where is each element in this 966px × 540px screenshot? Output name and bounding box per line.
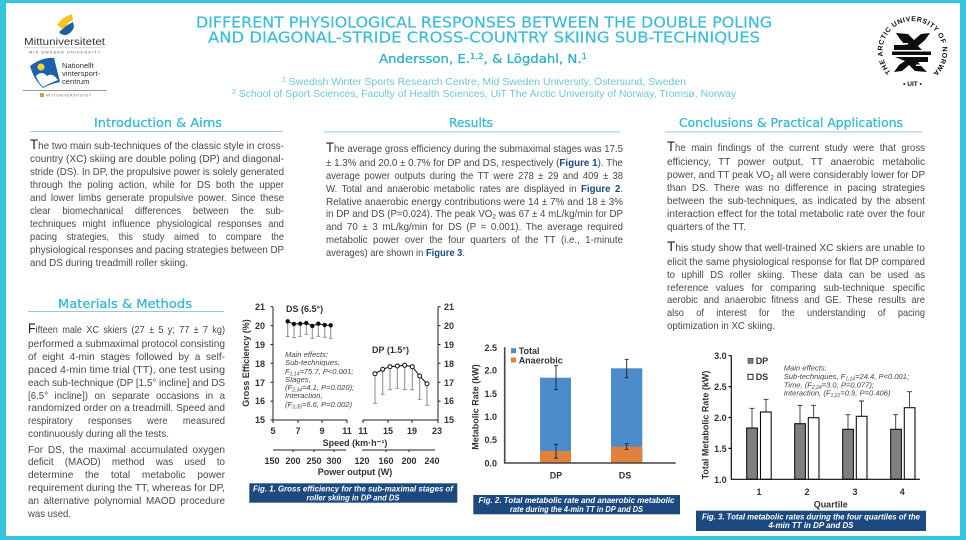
- x axis labels: 7: [295, 426, 301, 436]
- text: methods body: For DS, the maximal accumulated oxygen: [28, 445, 225, 456]
- caption: figure 1: roller skiing in DP and DS: [306, 492, 400, 502]
- text: conclusions body: reference values for comparing sub-technique specific: [667, 283, 925, 294]
- y axis labels: 1.5: [484, 389, 497, 399]
- text: methods body: continuously during all the tests.: [28, 429, 169, 440]
- logo: Nationellt vintersportcentrum: Nationellt: [62, 61, 95, 70]
- x axis labels: 1: [756, 487, 762, 497]
- authors: Andersson, E.: [379, 51, 465, 66]
- text: results body: metabolic power over the four quarters of the TT (i.e., 1-minute: [326, 235, 623, 246]
- y axis labels: 1.0: [714, 475, 727, 485]
- x axis labels: 15: [383, 426, 393, 436]
- statistics note: =4.1, P=0.020);: [302, 383, 354, 392]
- statistics note: (F: [285, 383, 292, 392]
- logo: UiT The Arctic University of Norway: • UIT •: [903, 81, 923, 88]
- y axis labels: 17: [444, 378, 454, 388]
- statistics note: 1,14: [290, 372, 300, 378]
- x axis labels: 5: [270, 426, 276, 436]
- y axis labels: 15: [255, 415, 265, 425]
- caption: figure 3: [696, 511, 926, 531]
- y axis labels: 3.0: [714, 351, 727, 361]
- statistics note: Stages,: [285, 375, 311, 384]
- legend: [748, 356, 768, 382]
- x axis labels: Quartile: [814, 500, 848, 510]
- x axis labels: DP: [550, 470, 562, 480]
- y axis labels: 2.5: [484, 343, 497, 353]
- title: [196, 14, 772, 46]
- text: methods body: paced 4-min time trial (TT), one test using: [28, 365, 225, 376]
- caption: figure 1: [249, 483, 457, 503]
- text: methods body: performed a submaximal protocol consisting: [28, 339, 225, 350]
- logo: Mittuniversitetet: MID SWEDEN UNIVERSITY: [29, 50, 100, 54]
- text: results body: ± 1.3% and 20.0 ± 0.7% for DP and DS, respectively (Figure 1). The: [326, 158, 623, 169]
- panel: results: [324, 115, 623, 259]
- affiliations: 1: [282, 77, 286, 84]
- logo: Nationellt vintersportcentrum: MITTUNIVERSITETET: [46, 94, 91, 98]
- text: results body: average power outputs during the TT were 278 ± 29 and 409 ± 38: [326, 171, 623, 182]
- bars: [747, 408, 915, 479]
- y axis labels: 19: [444, 340, 454, 350]
- y axis labels: 2.0: [714, 413, 727, 423]
- y axis labels: 18: [255, 359, 265, 369]
- y axis labels: 15: [444, 415, 454, 425]
- statistics note: =3.0, P=0.077);: [822, 380, 874, 389]
- statistics note: Interaction, (F: [784, 388, 831, 398]
- x axis labels: 11: [358, 426, 368, 436]
- axes: [728, 356, 920, 479]
- x axis labels: 9: [319, 426, 325, 436]
- error bars: [286, 321, 429, 405]
- y axis title: Total Metabolic Rate (kW): [700, 371, 710, 479]
- error bars: [554, 359, 629, 458]
- chart: figure 1 gross efficiency: DP (1.5°): [372, 345, 409, 355]
- text: methods body: Fifteen male XC skiers (27 ± 5 y; 77 ± 7 kg): [28, 320, 225, 336]
- chart: figure 1 gross efficiency: [241, 302, 457, 503]
- statistics note: Sub-techniques,: [285, 358, 340, 367]
- authors: , & Lögdahl, N.: [484, 51, 582, 66]
- text: conclusions body: aerobic and anaerobic fitness and GE. These results are: [667, 295, 925, 306]
- y axis labels: 0.5: [484, 435, 497, 445]
- logo: Mittuniversitetet: Mittuniversitetet: [24, 37, 105, 48]
- logo: Nationellt vintersportcentrum: [23, 58, 107, 98]
- x axis labels: 3: [852, 487, 858, 497]
- statistics note: [285, 350, 354, 410]
- y axis labels: 16: [255, 396, 265, 406]
- legend: Total: [519, 346, 540, 356]
- heading: results: Results: [449, 115, 493, 130]
- text: introduction body: techniques might influence physiological responses and: [30, 219, 284, 230]
- affiliations: Swedish Winter Sports Research Centre, Mid Sweden University, Östersund, Sweden: [286, 76, 686, 88]
- caption: figure 3: 4-min TT in DP and DS: [768, 520, 854, 530]
- statistics note: Main effects:: [784, 364, 827, 372]
- text: methods body: [6.5° incline]) on separate occasions in a: [28, 391, 225, 402]
- chart: figure 1 gross efficiency: Power output (W): [318, 467, 392, 477]
- authors: 1: [582, 52, 587, 61]
- text: results body: [326, 139, 623, 259]
- x axis labels: DS: [619, 470, 631, 480]
- panel: materials and methods: [27, 296, 226, 520]
- y axis labels: 0.0: [484, 458, 497, 468]
- x axis labels: [550, 470, 631, 480]
- text: introduction body: [30, 136, 284, 269]
- x axis labels: [264, 426, 442, 466]
- y axis labels: 21: [255, 302, 265, 312]
- statistics note: =0.9, P=0.406): [840, 388, 891, 398]
- text: results body: and 70 ± 3 mL/kg/min for DS (P = 0.001). The average required: [326, 222, 623, 233]
- x axis labels: 4: [900, 487, 905, 497]
- text: conclusions body: power, and TT peak VO: [667, 170, 776, 181]
- affiliations: [232, 76, 737, 100]
- y axis labels: 16: [444, 396, 454, 406]
- y axis labels: 21: [444, 302, 454, 312]
- chart: figure 2 metabolic rate: [470, 343, 680, 514]
- x axis labels: 300: [326, 456, 342, 466]
- affiliations: School of Sport Sciences, Faculty of Health Sciences, UiT The Arctic University of Norway, Tromsø, Norway: [236, 88, 737, 100]
- caption: figure 2: [473, 495, 680, 514]
- text: introduction body: through the poling action, while for DS both the upper: [30, 180, 284, 191]
- y axis labels: 2.5: [714, 382, 727, 392]
- x axis labels: 2: [804, 487, 810, 497]
- chart: figure 1 gross efficiency: Speed (km·h⁻¹): [323, 438, 387, 448]
- x axis labels: 19: [407, 426, 417, 436]
- y axis labels: 17: [255, 378, 265, 388]
- logo: Nationellt vintersportcentrum: vintersport-: [62, 69, 100, 78]
- affiliations: 2: [232, 89, 236, 96]
- x axis labels: 250: [306, 456, 322, 466]
- text: conclusions body: also of interest for the understanding of pacing: [667, 308, 925, 319]
- text: results body: The average gross efficiency during the submaximal stages was 17.5: [326, 139, 623, 155]
- text: conclusions body: [667, 138, 926, 332]
- statistics note: 1,14: [845, 376, 855, 382]
- legend: DP: [756, 356, 768, 366]
- y axis labels: [714, 351, 727, 485]
- text: conclusions body: quarters of the TT.: [667, 222, 746, 233]
- text: conclusions body: optimization in XC skiing.: [667, 321, 775, 332]
- text: introduction body: stride (DS). In DP, the propulsive power is solely generated: [30, 167, 284, 178]
- text: results body: was 67 ± 4 mL/kg/min for DP: [496, 209, 623, 220]
- statistics note: =6.6, P=0.002): [302, 400, 353, 409]
- series labels: DS (6.5°): [286, 304, 323, 314]
- text: methods body: determine the total metabolic power: [28, 470, 226, 481]
- text: conclusions body: to uphill DS roller skiing. These data can be used as: [667, 270, 925, 281]
- text: methods body: deficit (MAOD) method was used to: [28, 457, 225, 468]
- text: results body: in DP and DS (P=0.024). The peak VO: [326, 209, 504, 220]
- heading: conclusions: Conclusions & Practical Applications: [679, 115, 903, 130]
- y axis labels: 18: [444, 359, 454, 369]
- x axis labels: 200: [285, 456, 301, 466]
- text: conclusions body: between the sub-techniques, as indicated by the absent: [667, 196, 925, 207]
- title: AND DIAGONAL-STRIDE CROSS-COUNTRY SKIING SUB-TECHNIQUES: [208, 28, 760, 46]
- text: introduction body: country (XC) skiing are double poling (DP) and diagonal-: [30, 154, 284, 165]
- legend: Anaerobic: [519, 355, 563, 365]
- logo: Mittuniversitetet: [24, 14, 105, 54]
- legend: DS: [756, 372, 768, 382]
- axes: [270, 307, 440, 452]
- statistics note: =75.7, P<0.001;: [299, 367, 353, 376]
- caption: figure 2: Fig. 2. Total metabolic rate and anaerobic metabolic: [478, 495, 675, 505]
- text: conclusions body: interaction effect for the total metabolic rate over the four: [667, 209, 926, 220]
- statistics note: 2,34: [291, 388, 302, 394]
- text: results body: averages) are shown in Figure 3.: [326, 248, 465, 259]
- text: introduction body: clear biomechanical differences between the sub-: [30, 206, 284, 217]
- stacked bars: [540, 368, 642, 463]
- text: introduction body: and DS during treadmill roller skiing.: [30, 258, 188, 269]
- x axis labels: [756, 487, 905, 510]
- y axis labels: 20: [444, 321, 454, 331]
- text: introduction body: and lower limbs generate propulsive power. Since these: [30, 193, 284, 204]
- text: introduction body: pacing strategies, this study aimed to compare the: [30, 232, 284, 243]
- text: methods body: respiratory responses were measured: [28, 416, 225, 427]
- text: methods body: requirement during the TT, whereas for DP,: [28, 483, 225, 494]
- text: conclusions body: elicit the same physiological response for flat DP compared: [667, 257, 925, 268]
- statistics note: 1,21: [831, 393, 841, 399]
- caption: figure 3: Fig. 3. Total metabolic rates during the four quartiles of the: [702, 512, 920, 522]
- text: conclusions body: all were considerably lower for DP: [774, 170, 925, 181]
- statistics note: (F: [285, 400, 292, 409]
- logo: UiT The Arctic University of Norway: [878, 16, 948, 88]
- y axis labels: 2.0: [484, 366, 497, 376]
- text: results body: Relative anaerobic energy contributions were 14 ± 7% and 18 ± 3%: [326, 197, 623, 208]
- title: DIFFERENT PHYSIOLOGICAL RESPONSES BETWEEN THE DOUBLE POLING: [196, 14, 772, 32]
- text: introduction body: The two main sub-techniques of the classic style in cross-: [30, 136, 284, 152]
- x axis labels: 23: [432, 426, 442, 436]
- axis titles: Gross Efficiency (%): [241, 319, 251, 407]
- text: results body: 2: [492, 214, 496, 221]
- statistics note: 2,24: [811, 385, 822, 391]
- statistics note: Main effects:: [285, 350, 328, 359]
- text: methods body: of eight 4-min stages followed by a self-: [28, 352, 225, 363]
- error bars: [750, 392, 912, 429]
- heading: introduction: Introduction & Aims: [94, 115, 222, 130]
- text: conclusions body: efficiency, TT power output, TT anaerobic metabolic: [667, 157, 925, 168]
- x axis labels: 160: [378, 456, 394, 466]
- panel: introduction and aims: [30, 115, 284, 269]
- text: conclusions body: The main findings of the current study were that gross: [667, 138, 925, 154]
- caption: figure 2: rate during the 4-min TT in DP and DS: [510, 504, 643, 514]
- logo: Nationellt vintersportcentrum: centrum: [62, 77, 89, 86]
- x axis labels: 240: [424, 456, 440, 466]
- text: results body: W. Total and anaerobic metabolic rates are displayed in Figure 2.: [326, 184, 623, 195]
- series DS: [286, 320, 332, 328]
- y axis labels: 20: [255, 321, 265, 331]
- x axis labels: 150: [264, 456, 280, 466]
- statistics note: Interaction,: [285, 391, 323, 400]
- legend: [511, 346, 563, 365]
- text: methods body: [27, 320, 226, 520]
- x axis labels: 120: [354, 456, 370, 466]
- statistics note: 3,35: [292, 404, 302, 410]
- authors: 1,2: [470, 52, 484, 61]
- y axis labels: [255, 302, 454, 425]
- text: methods body: each sub-technique (DP [1.5° incline] and DS: [28, 378, 225, 389]
- text: conclusions body: than DS. There was no difference in pacing strategies: [667, 183, 925, 194]
- y axis labels: 1.5: [714, 444, 727, 454]
- text: conclusions body: This study show that well-trained XC skiers are unable to: [667, 238, 925, 254]
- text: methods body: was used.: [27, 509, 71, 520]
- y axis labels: 1.0: [484, 412, 497, 422]
- y axis labels: 19: [255, 340, 265, 350]
- caption: figure 1: Fig. 1. Gross efficiency for the sub-maximal stages of: [253, 484, 454, 494]
- text: introduction body: physiological responses and pacing strategies between DP: [30, 245, 284, 256]
- statistics note: Sub-techniques, F: [784, 372, 845, 381]
- statistics note: F: [285, 367, 290, 376]
- y axis labels: [484, 343, 497, 468]
- x axis labels: 200: [401, 456, 417, 466]
- x axis labels: 11: [342, 426, 352, 436]
- panel: conclusions and practical applications: [665, 115, 926, 332]
- heading: methods: Materials & Methods: [58, 296, 192, 311]
- axes: [505, 347, 676, 463]
- chart: figure 3 total metabolic rates by quartile: [696, 351, 926, 531]
- statistics note: [784, 364, 909, 399]
- statistics note: Time, (F: [784, 380, 812, 389]
- text: conclusions body: 2: [770, 175, 774, 182]
- statistics note: =24.4, P<0.001;: [855, 372, 909, 381]
- y axis title: Metabolic Rate (kW): [470, 364, 480, 450]
- text: methods body: randomized order on a treadmill. Speed and: [28, 403, 225, 414]
- text: methods body: an alternative polynomial MAOD procedure: [28, 496, 225, 507]
- series DP: [373, 363, 429, 386]
